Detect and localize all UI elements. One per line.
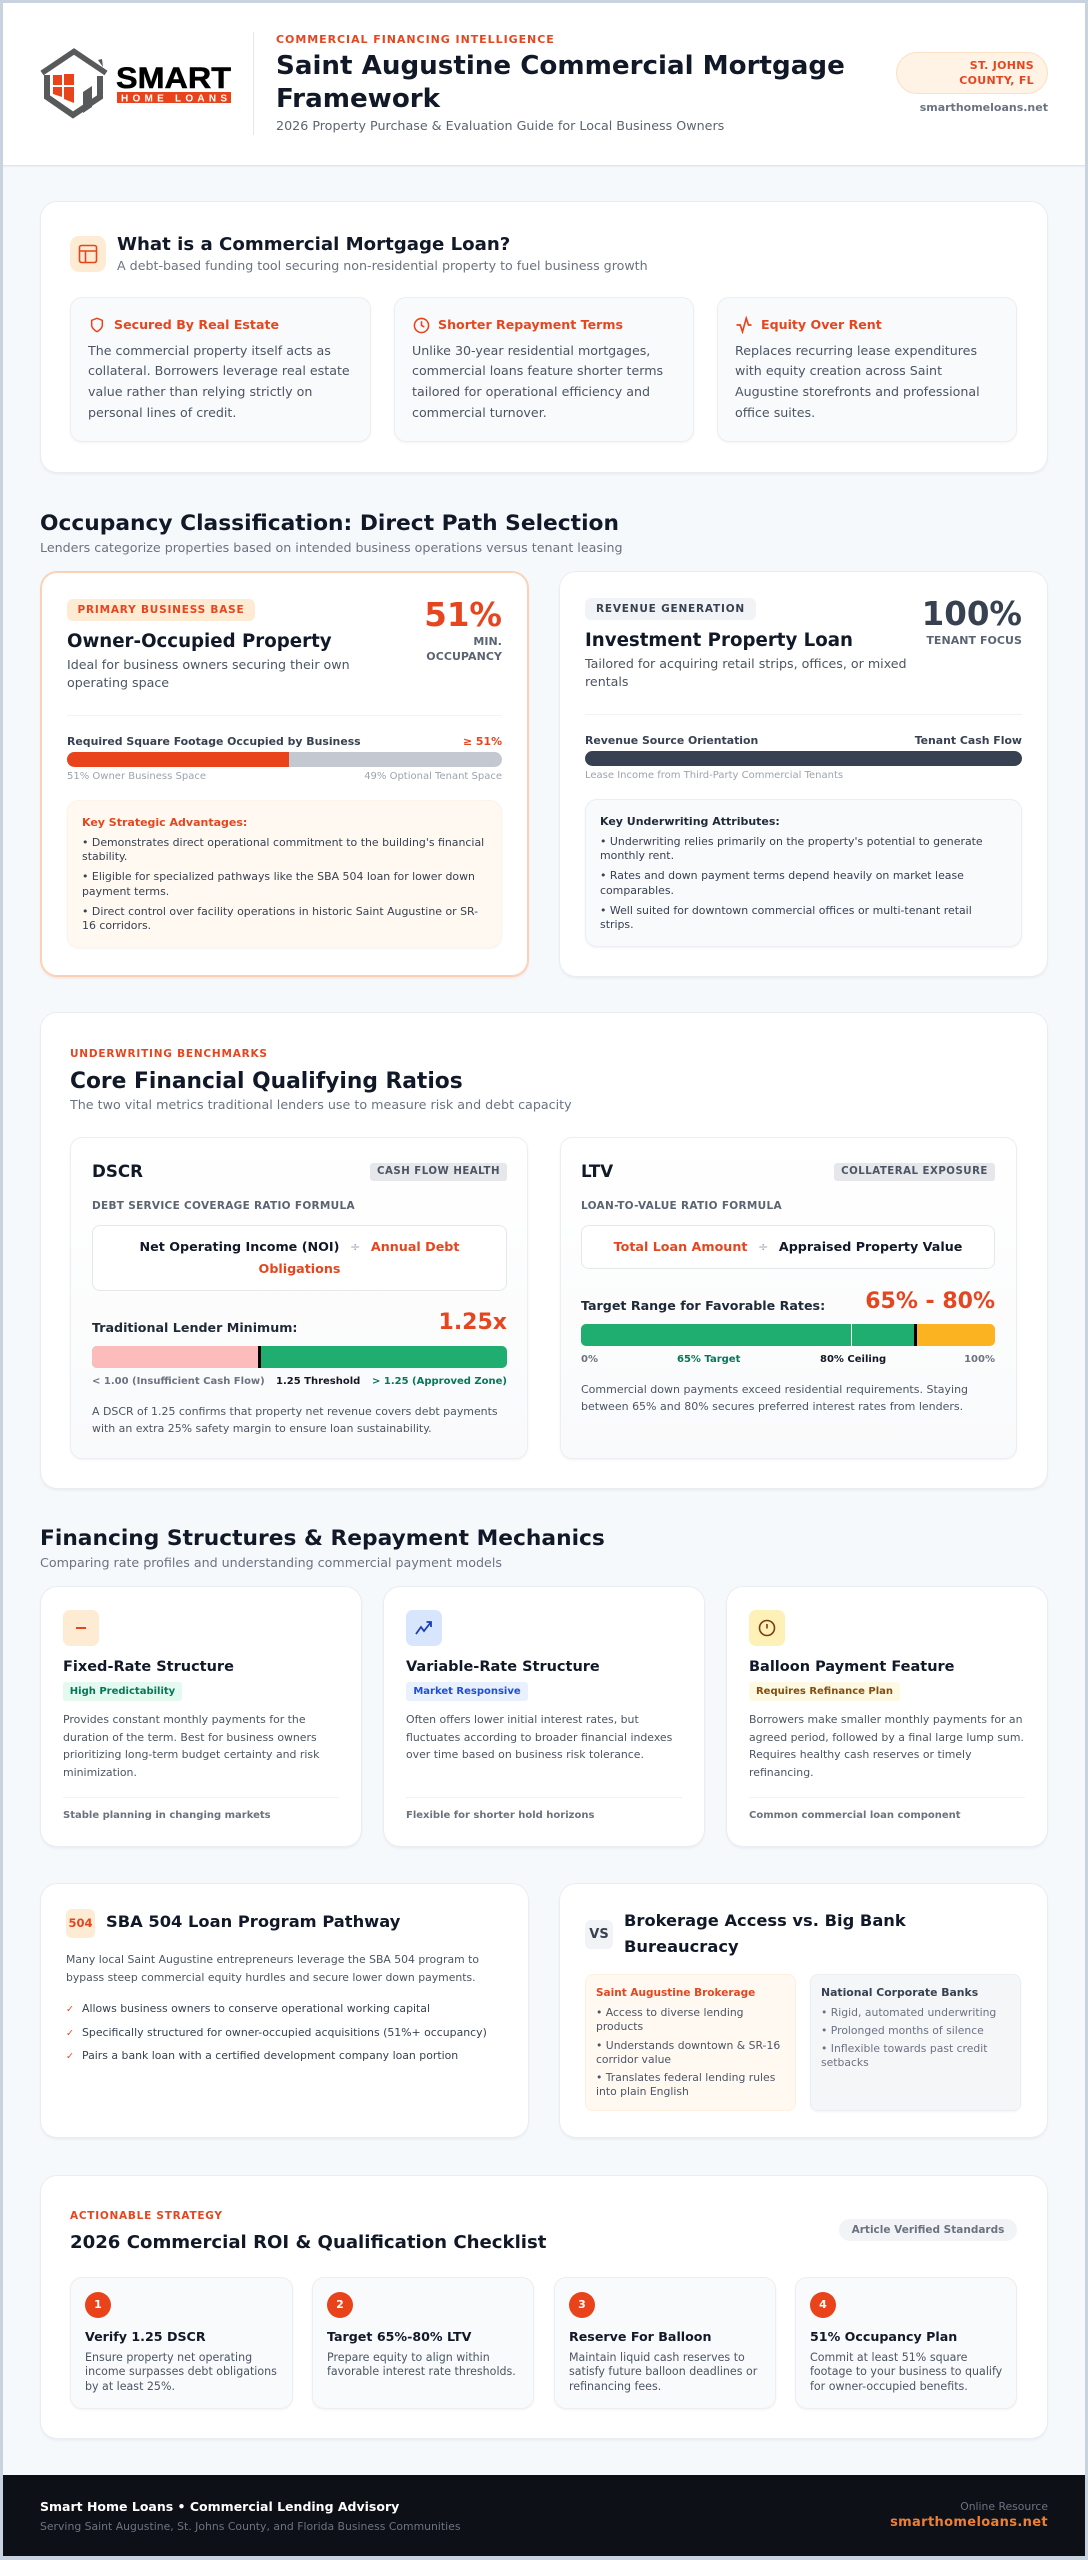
badge — [834, 1163, 995, 1181]
formula label: DEBT SERVICE COVERAGE RATIO FORMULA — [92, 1200, 355, 1212]
stat: 51%: 51% — [424, 596, 502, 634]
location pill: ST. JOHNS — [970, 59, 1034, 72]
bar legend right: 49% Optional Tenant Space — [364, 771, 502, 782]
card: equity over rent — [717, 297, 1017, 442]
point 3: • Translates federal lending rules — [596, 2071, 775, 2084]
description: Requires healthy cash reserves or timely — [749, 1748, 972, 1761]
bar legend left: 51% Owner Business Space — [67, 771, 206, 782]
metric name: LTV — [581, 1161, 613, 1181]
logo: Smart Home Loans: SMART — [116, 62, 231, 95]
icon: 504 — [66, 1909, 95, 1938]
point 1: • Rigid, automated underwriting — [821, 2006, 996, 2019]
subheading: The two vital metrics traditional lenders use to measure risk and debt capacity — [70, 1097, 572, 1112]
tag: Requires Refinance Plan — [756, 1686, 893, 1697]
step body: refinancing fees. — [569, 2380, 661, 2393]
note: between 65% and 80% secures preferred interest rates from lenders. — [581, 1400, 963, 1412]
attribute 3: • Well suited for downtown commercial offices or multi-tenant retail — [600, 904, 972, 917]
attribute 3 — [600, 904, 972, 931]
panel: variable-rate structure — [384, 1587, 704, 1846]
icon: vs: VS — [589, 1927, 609, 1942]
description: Borrowers make smaller monthly payments for an — [749, 1713, 1022, 1726]
description: Provides constant monthly payments for the — [63, 1713, 306, 1726]
card description — [584, 656, 907, 689]
logo: Smart Home Loans — [40, 48, 231, 119]
card body: office suites. — [735, 405, 815, 420]
card body: The commercial property itself acts as — [88, 343, 331, 358]
card title: Equity Over Rent — [761, 317, 882, 332]
bar value: ≥ 51% — [463, 734, 502, 748]
step 3 — [554, 2277, 776, 2409]
icon: vs — [585, 1920, 613, 1949]
attribute 1: • Underwriting relies primarily on the property's potential to generate — [600, 835, 983, 848]
icon: layout — [70, 236, 106, 272]
card body: commercial loans feature shorter terms — [412, 363, 663, 378]
eyebrow: ACTIONABLE STRATEGY — [70, 2210, 223, 2222]
online resource label: Online Resource — [960, 2500, 1048, 2513]
step body: footage to your business to qualify — [810, 2365, 1002, 2378]
box: national corporate banks — [810, 1974, 1021, 2111]
card body — [88, 343, 350, 420]
bar: DSCR threshold — [92, 1346, 507, 1368]
badge: REVENUE GENERATION — [596, 603, 745, 615]
target value: 65% - 80% — [865, 1289, 995, 1314]
target label: Target Range for Favorable Rates: — [581, 1298, 825, 1312]
heading: What is a Commercial Mortgage Loan? — [117, 234, 510, 255]
badge: CASH FLOW HEALTH — [377, 1166, 500, 1177]
step body — [327, 2351, 516, 2378]
description — [406, 1713, 672, 1761]
step body — [85, 2351, 277, 2393]
tag: High Predictability — [70, 1686, 175, 1697]
note: A DSCR of 1.25 confirms that property net revenue covers debt payments — [92, 1405, 498, 1418]
heading: Core Financial Qualifying Ratios — [70, 1069, 463, 1094]
badge — [585, 598, 756, 620]
step number: 1 — [94, 2298, 102, 2311]
bar: full tenant cash flow — [585, 751, 1022, 766]
scale label: 100%: 100% — [964, 1354, 995, 1365]
section subheading: financing: Comparing rate profiles and understanding commercial payment models — [40, 1555, 502, 1570]
badge: COLLATERAL EXPOSURE — [841, 1166, 988, 1177]
step title: Target 65%-80% LTV — [327, 2329, 471, 2344]
list item 2: ✓ — [66, 2028, 74, 2039]
advantage 3: 16 corridors. — [82, 919, 151, 932]
card title: Shorter Repayment Terms — [438, 317, 623, 332]
bar legend: Lease Income from Third-Party Commercial Tenants — [585, 770, 843, 781]
panel: what is a commercial mortgage loan — [41, 202, 1047, 472]
formula box — [581, 1225, 995, 1269]
step 4 — [795, 2277, 1017, 2409]
step number: 2 — [336, 2298, 344, 2311]
footer subtitle: Serving Saint Augustine, St. Johns County, and Florida Business Communities — [40, 2520, 460, 2533]
card description — [67, 657, 350, 690]
note: with an extra 25% safety margin to ensure loan sustainability. — [92, 1422, 432, 1434]
icon: clock — [414, 318, 430, 334]
point 1: products — [596, 2020, 643, 2033]
step body: satisfy future balloon deadlines or — [569, 2365, 757, 2378]
card description: Tailored for acquiring retail strips, offices, or mixed — [585, 656, 907, 671]
title — [276, 51, 845, 114]
badge — [839, 2219, 1017, 2241]
scale label: 80% ceiling: 80% Ceiling — [820, 1354, 886, 1365]
point 2: • Understands downtown & SR-16 — [596, 2039, 780, 2052]
point 1 — [596, 2006, 744, 2033]
advantage 1: stability. — [82, 850, 127, 863]
description — [749, 1713, 1024, 1779]
step number: 4 — [819, 2298, 827, 2311]
description: over time based on business risk tolerance. — [406, 1748, 644, 1761]
subheading: A debt-based funding tool securing non-residential property to fuel business growth — [117, 258, 648, 273]
scale label: threshold: 1.25 Threshold — [276, 1376, 360, 1387]
card title: Brokerage Access vs. Big Bank — [624, 1911, 906, 1930]
list item 2: Specifically structured for owner-occupied acquisitions (51%+ occupancy) — [82, 2026, 487, 2039]
badge: Article Verified Standards — [852, 2224, 1004, 2236]
step body: by at least 25%. — [85, 2380, 175, 2393]
point 2: corridor value — [596, 2053, 671, 2066]
card description: rentals — [585, 674, 629, 689]
panel: core financial qualifying ratios — [41, 1013, 1047, 1488]
stat label — [426, 635, 502, 662]
panel: fixed-rate structure — [41, 1587, 361, 1846]
step body: Commit at least 51% square — [810, 2351, 967, 2364]
advantage 2: payment terms. — [82, 885, 169, 898]
step body: Ensure property net operating — [85, 2351, 252, 2364]
bar: 51 percent occupancy — [67, 752, 502, 767]
box title: Key Underwriting Attributes: — [600, 815, 780, 828]
subtitle: 2026 Property Purchase & Evaluation Guide for Local Business Owners — [276, 118, 724, 133]
icon: pulse — [736, 316, 752, 334]
step title: Reserve For Balloon — [569, 2329, 712, 2344]
stat label: MIN. — [473, 635, 502, 648]
panel: ROI and qualification checklist — [41, 2176, 1047, 2438]
card body: commercial turnover. — [412, 405, 547, 420]
card: DSCR — [70, 1137, 528, 1459]
formula label: LOAN-TO-VALUE RATIO FORMULA — [581, 1200, 782, 1212]
icon: trending up — [406, 1610, 442, 1646]
card body: with equity creation across Saint — [735, 363, 942, 378]
box: Saint Augustine brokerage — [585, 1974, 796, 2111]
card title: Owner-Occupied Property — [67, 630, 332, 652]
heading: 2026 Commercial ROI & Qualification Checklist — [70, 2232, 546, 2253]
box title: National Corporate Banks — [821, 1986, 978, 1999]
card body: value rather than relying strictly on — [88, 384, 312, 399]
metric name: DSCR — [92, 1161, 143, 1181]
advantage 2 — [82, 870, 475, 898]
description: Often offers lower initial interest rates, but — [406, 1713, 639, 1726]
stat label: OCCUPANCY — [426, 650, 502, 662]
card title: Variable-Rate Structure — [406, 1659, 600, 1675]
advantage 3 — [82, 905, 478, 932]
panel: brokerage vs big bank — [560, 1884, 1047, 2137]
title: Saint Augustine Commercial Mortgage — [276, 51, 845, 81]
box: key underwriting attributes — [585, 799, 1022, 947]
advantage 3: • Direct control over facility operations in historic Saint Augustine or SR- — [82, 905, 478, 918]
description: refinancing. — [749, 1766, 814, 1779]
advantage 1 — [82, 836, 484, 863]
panel: investment property loan — [560, 572, 1047, 976]
description — [63, 1713, 320, 1779]
point 3 — [821, 2042, 988, 2069]
formula box: Net Operating Income (NOI) ÷ Annual Debt — [140, 1239, 459, 1254]
card title: Fixed-Rate Structure — [63, 1659, 234, 1675]
icon: shield — [90, 318, 104, 332]
step title: Verify 1.25 DSCR — [85, 2329, 206, 2344]
attribute 2: comparables. — [600, 884, 674, 897]
box title: Key Strategic Advantages: — [82, 816, 247, 829]
section heading: occupancy classification: Occupancy Classification: Direct Path Selection — [40, 511, 619, 536]
note — [92, 1405, 498, 1434]
card body — [412, 343, 663, 420]
step number — [810, 2292, 836, 2318]
step body: favorable interest rate thresholds. — [327, 2365, 516, 2378]
description: agreed period, followed by a final large lump sum. — [749, 1731, 1024, 1744]
footnote: Common commercial loan component — [749, 1810, 961, 1821]
card body: collateral. Borrowers leverage real estate — [88, 363, 350, 378]
badge — [370, 1163, 507, 1181]
header — [0, 0, 1088, 165]
point 3: into plain English — [596, 2085, 689, 2098]
card title — [624, 1911, 906, 1956]
description: Many local Saint Augustine entrepreneurs leverage the SBA 504 program to — [66, 1953, 479, 1966]
card body: personal lines of credit. — [88, 405, 236, 420]
stat label: TENANT FOCUS — [926, 634, 1022, 647]
formula box: Total Loan Amount ÷ Appraised Property Value — [614, 1239, 962, 1254]
step number — [569, 2292, 595, 2318]
scale label: insufficient: < 1.00 (Insufficient Cash Flow) — [92, 1376, 265, 1387]
step body: income surpasses debt obligations — [85, 2365, 277, 2378]
bar: LTV range — [581, 1324, 995, 1346]
footer — [3, 2475, 1085, 2556]
bar label: Revenue Source Orientation — [585, 734, 758, 746]
box: key strategic advantages — [67, 800, 502, 948]
section subheading: occupancy: Lenders categorize properties based on intended business operations versus tenant leasing — [40, 540, 623, 555]
formula box: Obligations — [259, 1261, 340, 1276]
description: minimization. — [63, 1766, 137, 1779]
step 2 — [312, 2277, 534, 2409]
website: smarthomeloans.net — [920, 101, 1048, 114]
badge — [67, 599, 255, 621]
card title: Balloon Payment Feature — [749, 1659, 955, 1675]
card: LTV — [560, 1137, 1017, 1459]
scale label: 0%: 0% — [581, 1354, 598, 1365]
point 3: setbacks — [821, 2056, 869, 2069]
description — [66, 1953, 479, 1984]
attribute 1 — [600, 835, 983, 862]
footnote: Stable planning in changing markets — [63, 1810, 271, 1821]
note — [581, 1383, 968, 1412]
advantage 2: • Eligible for specialized pathways like the SBA 504 loan for lower down — [82, 870, 475, 883]
step title: 51% Occupancy Plan — [810, 2329, 957, 2344]
bar label: Required Square Footage Occupied by Business — [67, 734, 361, 748]
step number: 3 — [578, 2298, 586, 2311]
step body — [569, 2351, 758, 2393]
point 2: • Prolonged months of silence — [821, 2024, 984, 2037]
logo: Smart Home Loans: HOME LOANS — [121, 94, 227, 104]
eyebrow: UNDERWRITING BENCHMARKS — [70, 1048, 268, 1060]
card body: Augustine storefronts and professional — [735, 384, 980, 399]
card title: Secured By Real Estate — [114, 317, 279, 332]
tag — [406, 1682, 528, 1701]
attribute 1: monthly rent. — [600, 849, 674, 862]
minimum label: Traditional Lender Minimum: — [92, 1320, 297, 1334]
icon: 504: 504 — [68, 1916, 92, 1930]
card body: tailored for operational efficiency and — [412, 384, 650, 399]
list item 3: ✓ — [66, 2051, 74, 2062]
step number — [327, 2292, 353, 2318]
scale label: approved: > 1.25 (Approved Zone) — [372, 1376, 507, 1387]
scale label: 65% target: 65% Target — [677, 1354, 740, 1365]
card: shorter repayment terms — [394, 297, 694, 442]
card: secured by real estate — [70, 297, 371, 442]
list item 3: Pairs a bank loan with a certified development company loan portion — [82, 2049, 458, 2062]
footnote: Flexible for shorter hold horizons — [406, 1810, 594, 1821]
card body: Unlike 30-year residential mortgages, — [412, 343, 650, 358]
advantage 1: • Demonstrates direct operational commitment to the building's financial — [82, 836, 484, 849]
list item 1: ✓ — [66, 2004, 74, 2015]
step body: Maintain liquid cash reserves to — [569, 2351, 745, 2364]
card title: SBA 504 Loan Program Pathway — [106, 1912, 400, 1931]
step number — [85, 2292, 111, 2318]
title: Framework — [276, 84, 440, 114]
section heading: financing structures: Financing Structures & Repayment Mechanics — [40, 1526, 605, 1551]
list item 1: Allows business owners to conserve operational working capital — [82, 2002, 430, 2015]
card description: operating space — [67, 675, 169, 690]
note: Commercial down payments exceed residential requirements. Staying — [581, 1383, 968, 1396]
icon: alert circle — [749, 1610, 785, 1646]
panel: balloon payment feature — [727, 1587, 1047, 1846]
panel: SBA 504 pathway — [41, 1884, 528, 2137]
description: duration of the term. Best for business owners — [63, 1731, 317, 1744]
eyebrow: COMMERCIAL FINANCING INTELLIGENCE — [276, 33, 555, 46]
step 1 — [70, 2277, 293, 2409]
point 1: • Access to diverse lending — [596, 2006, 744, 2019]
formula box — [92, 1225, 507, 1291]
attribute 2: • Rates and down payment terms depend heavily on market lease — [600, 869, 964, 882]
description: prioritizing long-term budget certainty and risk — [63, 1748, 319, 1761]
tag — [749, 1682, 900, 1701]
footer title: Smart Home Loans • Commercial Lending Advisory — [40, 2499, 399, 2514]
tag — [63, 1682, 182, 1701]
stat: 100%: 100% — [922, 595, 1022, 633]
card body: Replaces recurring lease expenditures — [735, 343, 977, 358]
panel: owner-occupied property — [41, 572, 528, 976]
step body: Prepare equity to align within — [327, 2351, 490, 2364]
card title: Bureaucracy — [624, 1936, 739, 1956]
point 2 — [596, 2039, 780, 2066]
minimum value: 1.25x — [439, 1310, 507, 1335]
point 3 — [596, 2071, 775, 2098]
box title: Saint Augustine Brokerage — [596, 1987, 755, 1999]
step body: for owner-occupied benefits. — [810, 2380, 968, 2393]
card body — [735, 343, 980, 420]
location pill: COUNTY, FL — [959, 74, 1034, 86]
step body — [810, 2351, 1002, 2393]
icon: minus — [63, 1610, 99, 1646]
description: bypass steep commercial equity hurdles and secure lower down payments. — [66, 1971, 476, 1984]
card title: Investment Property Loan — [585, 630, 853, 650]
footer website: smarthomeloans.net — [890, 2515, 1048, 2530]
attribute 2 — [600, 869, 964, 897]
bar value: Tenant Cash Flow — [915, 734, 1022, 746]
attribute 3: strips. — [600, 918, 634, 931]
badge: PRIMARY BUSINESS BASE — [78, 604, 244, 616]
card description: Ideal for business owners securing their own — [67, 657, 350, 672]
location pill — [896, 52, 1048, 94]
point 3: • Inflexible towards past credit — [821, 2042, 987, 2055]
tag: Market Responsive — [413, 1686, 521, 1697]
description: fluctuates according to broader financial indexes — [406, 1731, 672, 1744]
